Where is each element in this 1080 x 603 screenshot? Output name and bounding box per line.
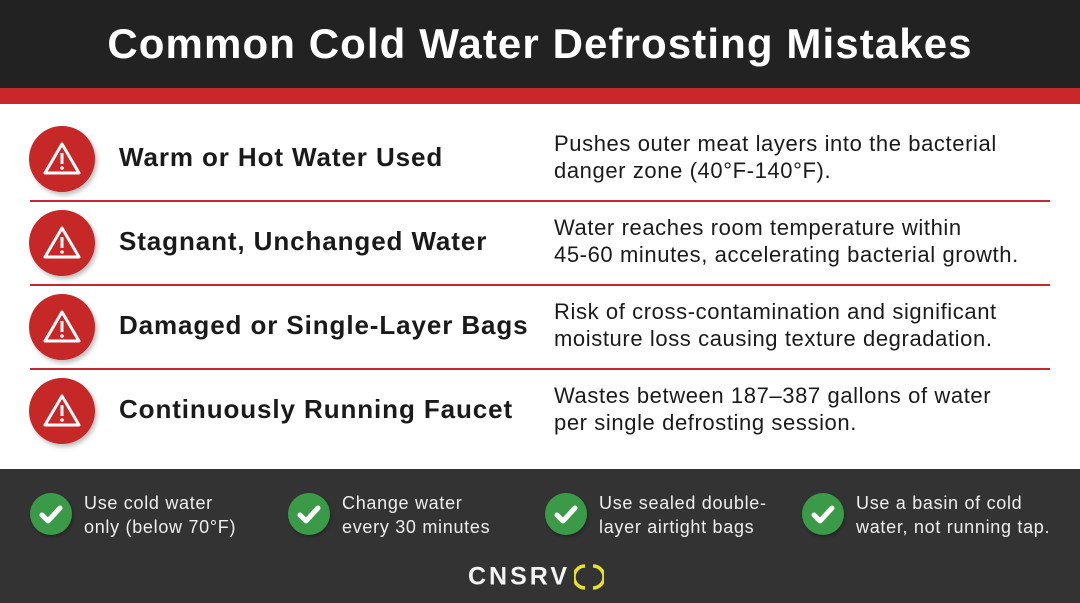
row: damaged bags — [28, 294, 997, 366]
description: Risk of cross-contamination and significant — [554, 299, 997, 324]
tip 4 — [802, 493, 1050, 537]
panel: tips — [0, 469, 1080, 603]
icon: warning — [29, 210, 95, 276]
description: danger zone (40°F-140°F). — [554, 158, 831, 183]
heading: Continuously Running Faucet — [119, 394, 513, 424]
row: warm water — [28, 126, 997, 198]
row: stagnant water — [28, 210, 1019, 282]
tip 4: water, not running tap. — [856, 517, 1050, 537]
tip 2: Change water — [342, 493, 462, 513]
description: moisture loss causing texture degradation. — [554, 326, 993, 351]
description: Water reaches room temperature within — [554, 215, 962, 240]
description: Wastes between 187–387 gallons of water — [554, 383, 991, 408]
icon: warning — [29, 294, 95, 360]
heading: Stagnant, Unchanged Water — [119, 226, 487, 256]
icon: warning — [29, 378, 95, 444]
tip 3: Use sealed double- — [599, 493, 767, 513]
heading: Warm or Hot Water Used — [119, 142, 443, 172]
description — [554, 215, 1019, 267]
heading: Damaged or Single-Layer Bags — [119, 310, 529, 340]
description: 45-60 minutes, accelerating bacterial growth. — [554, 242, 1019, 267]
tip 3: layer airtight bags — [599, 517, 754, 537]
description — [554, 131, 997, 183]
tip 2 — [288, 493, 490, 537]
tip 1 — [30, 493, 236, 537]
description: per single defrosting session. — [554, 410, 857, 435]
description: Pushes outer meat layers into the bacterial — [554, 131, 997, 156]
tip 3 — [545, 493, 767, 537]
description — [554, 383, 991, 435]
description — [554, 299, 997, 351]
title — [0, 0, 1080, 88]
tip 4: Use a basin of cold — [856, 493, 1022, 513]
row: running faucet — [28, 378, 991, 450]
tip 1: Use cold water — [84, 493, 213, 513]
tip 2: every 30 minutes — [342, 517, 490, 537]
icon: warning — [29, 126, 95, 192]
tip 1: only (below 70°F) — [84, 517, 236, 537]
logo: CNSRV — [468, 562, 570, 590]
title: Common Cold Water Defrosting Mistakes — [107, 20, 973, 67]
